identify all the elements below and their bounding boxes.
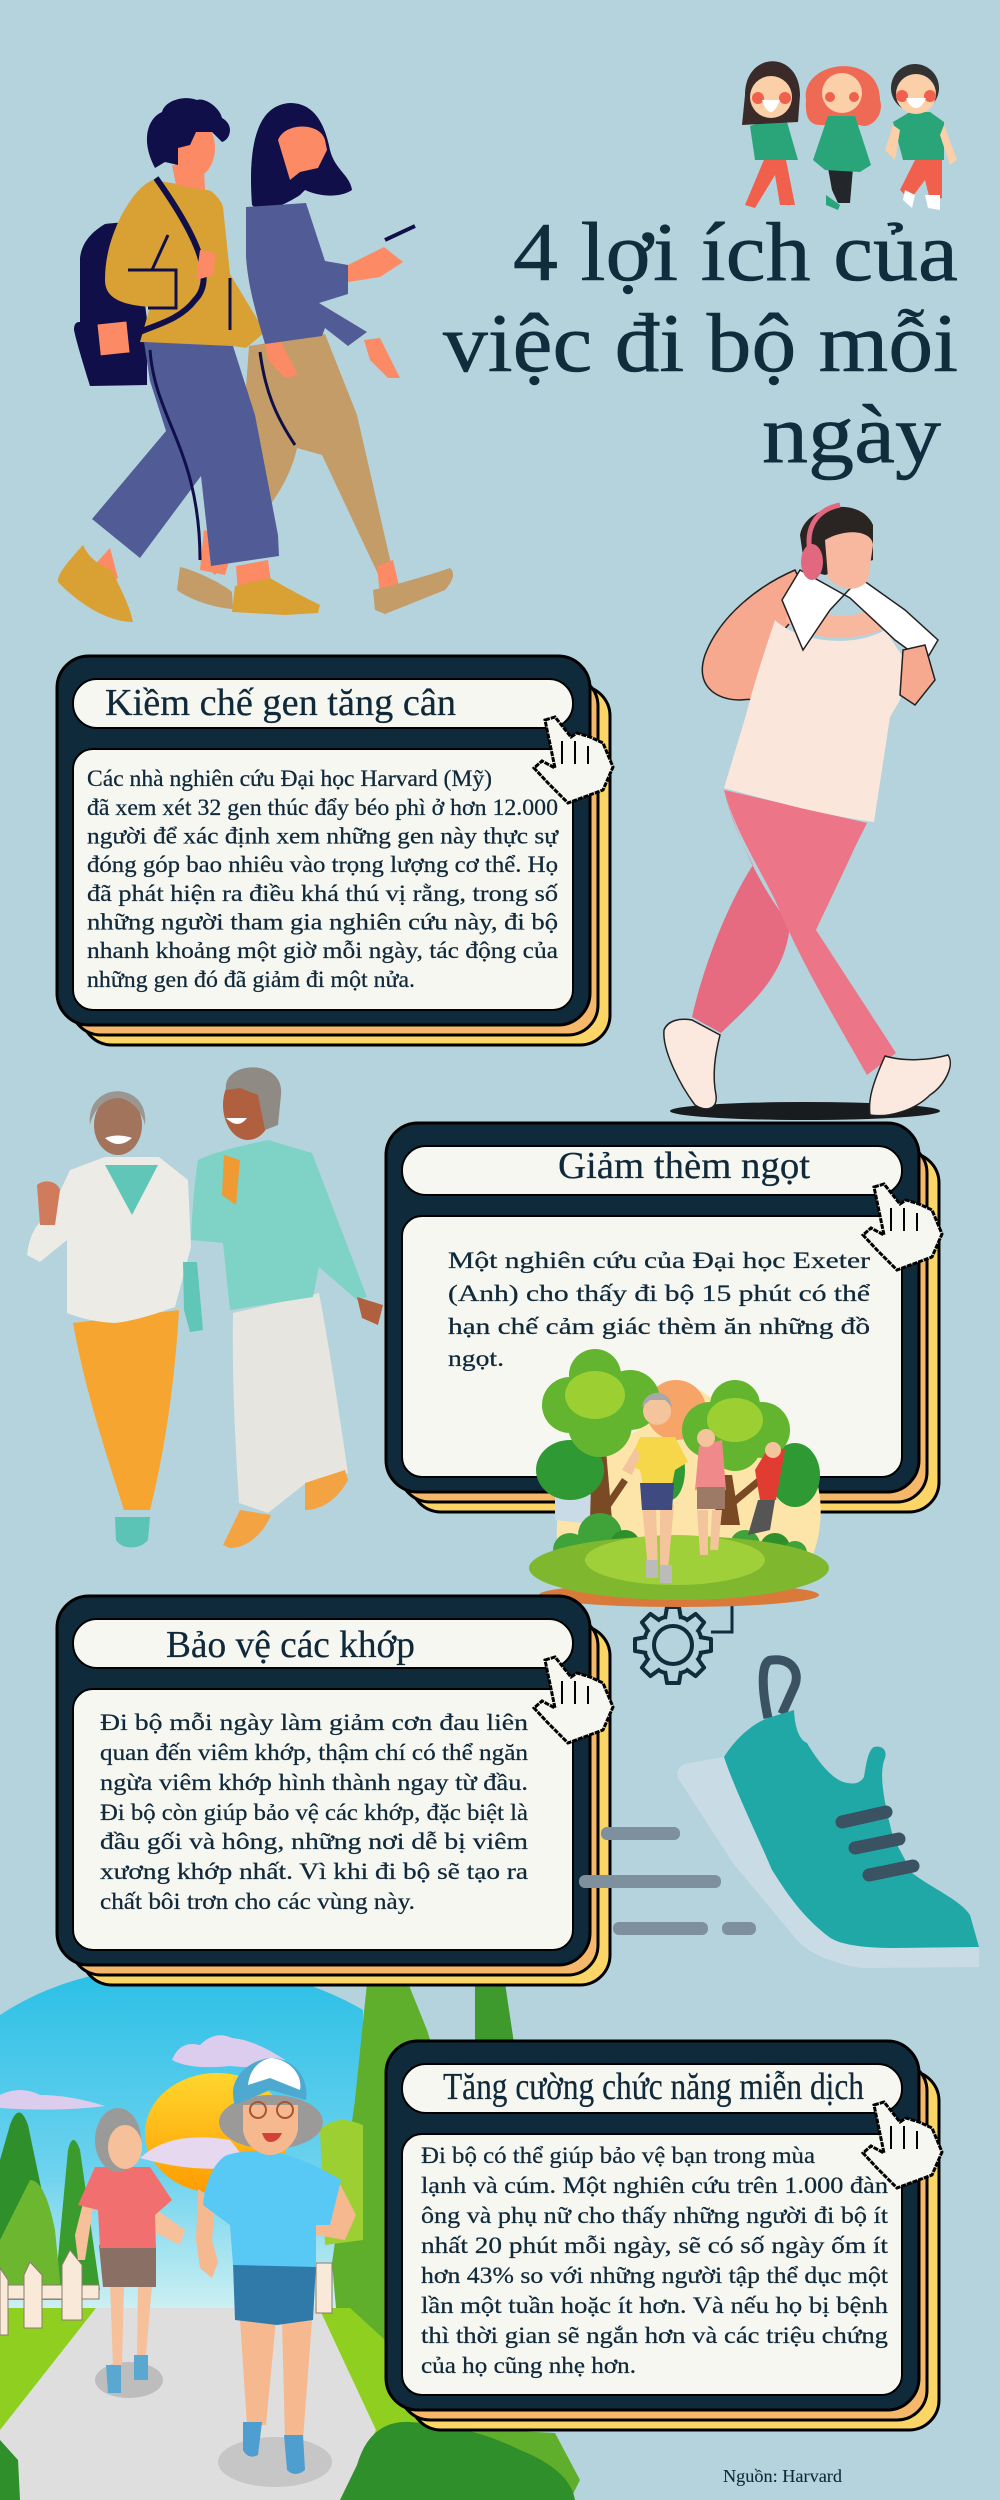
person left xyxy=(27,1091,203,1548)
front woman xyxy=(196,2058,356,2487)
text block: đóng góp bao nhiêu vào trọng lượng cơ thể. Họ xyxy=(87,852,558,877)
illustration: two young people walking xyxy=(58,98,453,622)
text block: quan đến viêm khớp, thậm chí có thể ngăn xyxy=(100,1740,529,1765)
card frame 3 xyxy=(57,1596,610,1985)
illustration: running shoe xyxy=(677,1660,979,1968)
trees xyxy=(536,1349,820,1507)
illustration: seniors jogging outdoors xyxy=(0,1965,580,2500)
text block: lần một tuần hoặc ít hơn. Và nếu họ bị bệnh xyxy=(421,2293,889,2318)
text block: đã phát hiện ra điều khá thú vị rằng, trong số xyxy=(87,881,559,906)
text block: ngừa viêm khớp hình thành ngay từ đầu. xyxy=(100,1770,528,1795)
text block: lạnh và cúm. Một nghiên cứu trên 1.000 đàn xyxy=(421,2173,889,2198)
head xyxy=(800,507,873,575)
card: Tăng cường chức năng miễn dịch xyxy=(386,2041,942,2430)
text block: thì thời gian sẽ ngắn hơn và các triệu chứng xyxy=(421,2323,889,2348)
text block: Đi bộ mỗi ngày làm giảm cơn đau liên xyxy=(100,1710,529,1735)
source credit: Nguồn: Harvard xyxy=(723,2466,842,2486)
title: việc đi bộ mỗi xyxy=(443,297,958,390)
illustration: elderly couple walking xyxy=(27,1067,383,1548)
back woman xyxy=(75,2108,185,2398)
sun and clouds xyxy=(145,2073,289,2193)
ground and path xyxy=(0,2308,560,2500)
heading: Kiềm chế gen tăng cân xyxy=(105,682,456,724)
text block: đầu gối và hông, những nơi dễ bị viêm xyxy=(100,1829,528,1854)
person right xyxy=(191,1067,383,1548)
leggings xyxy=(692,790,790,1033)
title: ngày xyxy=(762,388,941,481)
text block: người để xác định xem những gen này thực sự xyxy=(87,824,560,848)
towel xyxy=(782,570,938,662)
text block: Đi bộ có thể giúp bảo vệ bạn trong mùa xyxy=(421,2143,815,2168)
icon: pointing hand cursor xyxy=(863,2102,942,2188)
island xyxy=(539,1583,819,1607)
fence xyxy=(0,2250,332,2335)
icon: pointing hand cursor xyxy=(534,1657,613,1743)
text block: những người tham gia nghiên cứu này, đi bộ xyxy=(87,910,558,934)
trees xyxy=(0,2112,60,2290)
illustration: gear with connector xyxy=(635,1600,732,1683)
text block: nhanh khoảng một giờ mỗi ngày, tác động của xyxy=(87,938,558,963)
text block: những gen đó đã giảm đi một nửa. xyxy=(87,967,415,992)
illustration: woman jogging with headphones xyxy=(664,505,950,1120)
text block: đã xem xét 32 gen thúc đẩy béo phì ở hơn 12.000 xyxy=(87,795,558,820)
card: Kiềm chế gen tăng cân xyxy=(57,656,613,1045)
shoes xyxy=(664,1019,720,1109)
heading: Giảm thèm ngọt xyxy=(558,1145,810,1187)
text block: xương khớp nhất. Vì khi đi bộ sẽ tạo ra xyxy=(100,1859,528,1884)
text block: Các nhà nghiên cứu Đại học Harvard (Mỹ) xyxy=(87,766,492,791)
people xyxy=(697,1510,722,1555)
heading: Tăng cường chức năng miễn dịch xyxy=(443,2066,864,2108)
text block: ông và phụ nữ cho thấy những người đi bộ ít xyxy=(421,2203,889,2228)
text block: (Anh) cho thấy đi bộ 15 phút có thể xyxy=(448,1281,871,1306)
text block xyxy=(448,1248,871,1371)
text block: chất bôi trơn cho các vùng này. xyxy=(100,1889,415,1914)
title xyxy=(443,206,958,481)
text block: hơn 43% so với những người tập thể dục một xyxy=(421,2263,889,2288)
icon: pointing hand cursor xyxy=(863,1184,942,1270)
card: Bảo vệ các khớp xyxy=(57,1596,613,1985)
card frame 4 xyxy=(386,2041,939,2430)
text block: Đi bộ còn giúp bảo vệ các khớp, đặc biệt là xyxy=(100,1800,528,1825)
text block: Một nghiên cứu của Đại học Exeter xyxy=(448,1248,870,1273)
text block xyxy=(100,1710,529,1914)
text block: nhất 20 phút mỗi ngày, sẽ có số ngày ốm ít xyxy=(421,2233,889,2258)
bushes xyxy=(578,1513,622,1557)
illustration: seniors exercising in the park xyxy=(529,1349,829,1607)
heading: Bảo vệ các khớp xyxy=(166,1624,415,1666)
top xyxy=(724,620,905,822)
text block xyxy=(421,2143,889,2378)
card frame 1 xyxy=(57,656,610,1045)
text block: của họ cũng nhẹ hơn. xyxy=(421,2353,636,2378)
icon: pointing hand cursor xyxy=(534,717,613,803)
speed lines beside the shoe xyxy=(579,1827,756,1935)
text block: hạn chế cảm giác thèm ăn những đồ xyxy=(448,1314,870,1339)
card: Giảm thèm ngọt xyxy=(386,1123,942,1512)
sky xyxy=(0,1965,363,2310)
title: 4 lợi ích của xyxy=(513,206,958,299)
text block xyxy=(87,766,560,992)
text block: ngọt. xyxy=(448,1346,504,1371)
card frame 2 xyxy=(386,1123,939,1512)
arm and shoulder xyxy=(702,570,833,712)
illustration: three children xyxy=(742,61,957,210)
